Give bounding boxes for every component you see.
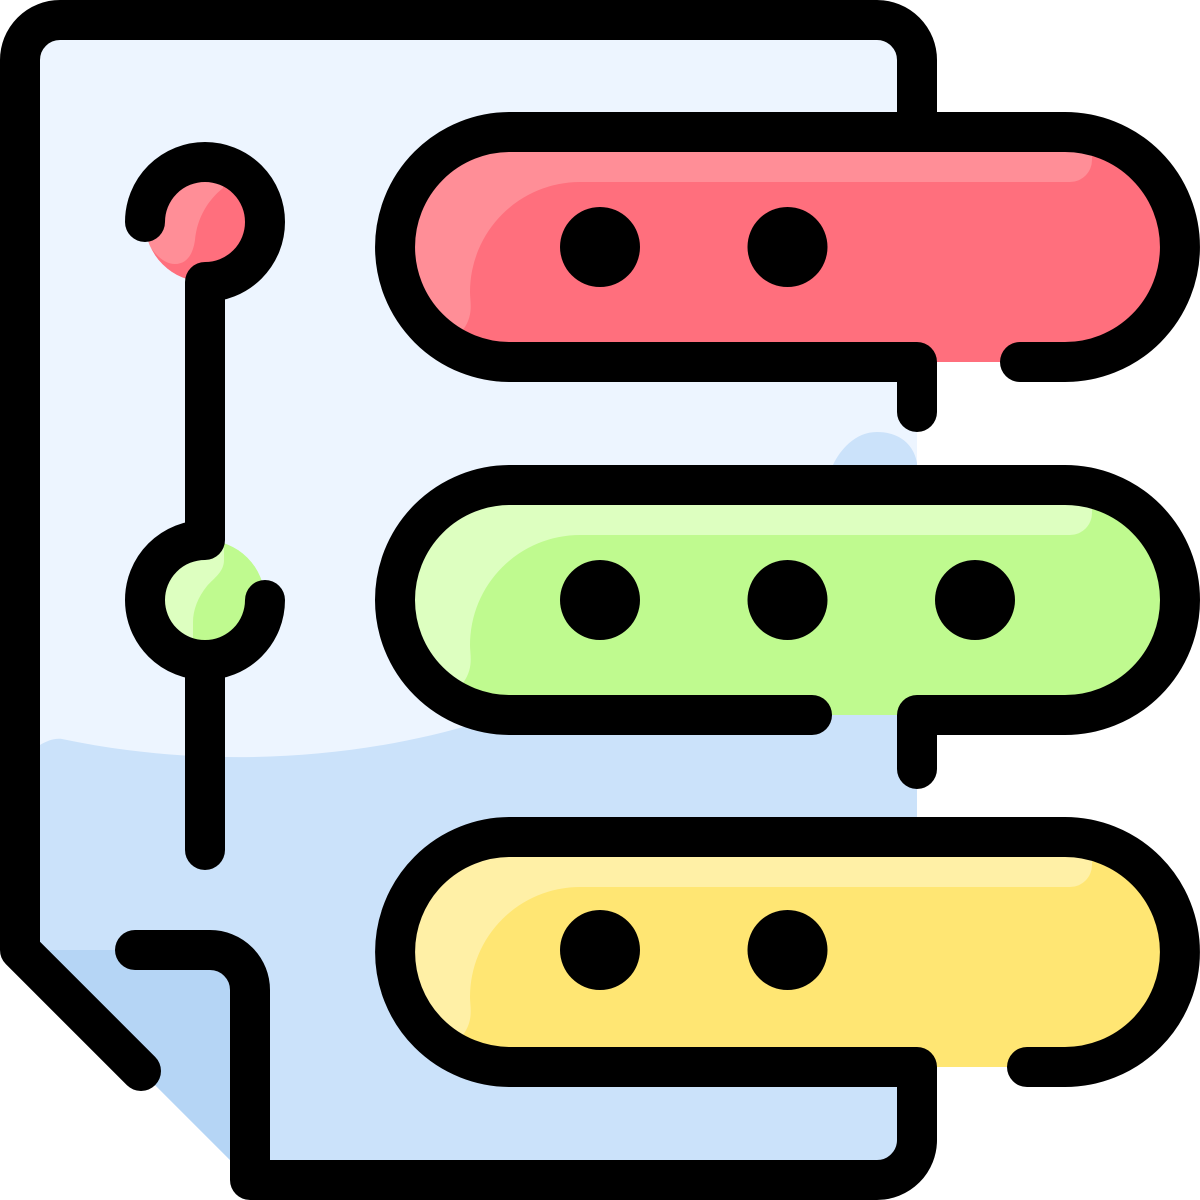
red pill dots [560, 207, 828, 287]
timeline node fill: red [148, 182, 245, 278]
paper outline: fold, bottom edge and yellow pill [135, 837, 1180, 1180]
green pill dots [560, 560, 1015, 640]
paper folded corner [20, 950, 250, 1180]
timeline tail [185, 660, 225, 850]
pill fill: red [415, 152, 1160, 362]
yellow pill dots [560, 910, 828, 990]
paper lower shade [20, 432, 917, 1180]
paper outline: top and left edges [20, 20, 917, 1071]
paper sheet fill [20, 20, 917, 1180]
green pill outline [395, 485, 1180, 769]
pill fill: green [415, 505, 1160, 715]
red pill outline [395, 132, 1180, 412]
pill fill: yellow [415, 857, 1160, 1067]
timeline line with first and second nodes [145, 162, 265, 660]
timeline node fill: green [165, 544, 262, 640]
